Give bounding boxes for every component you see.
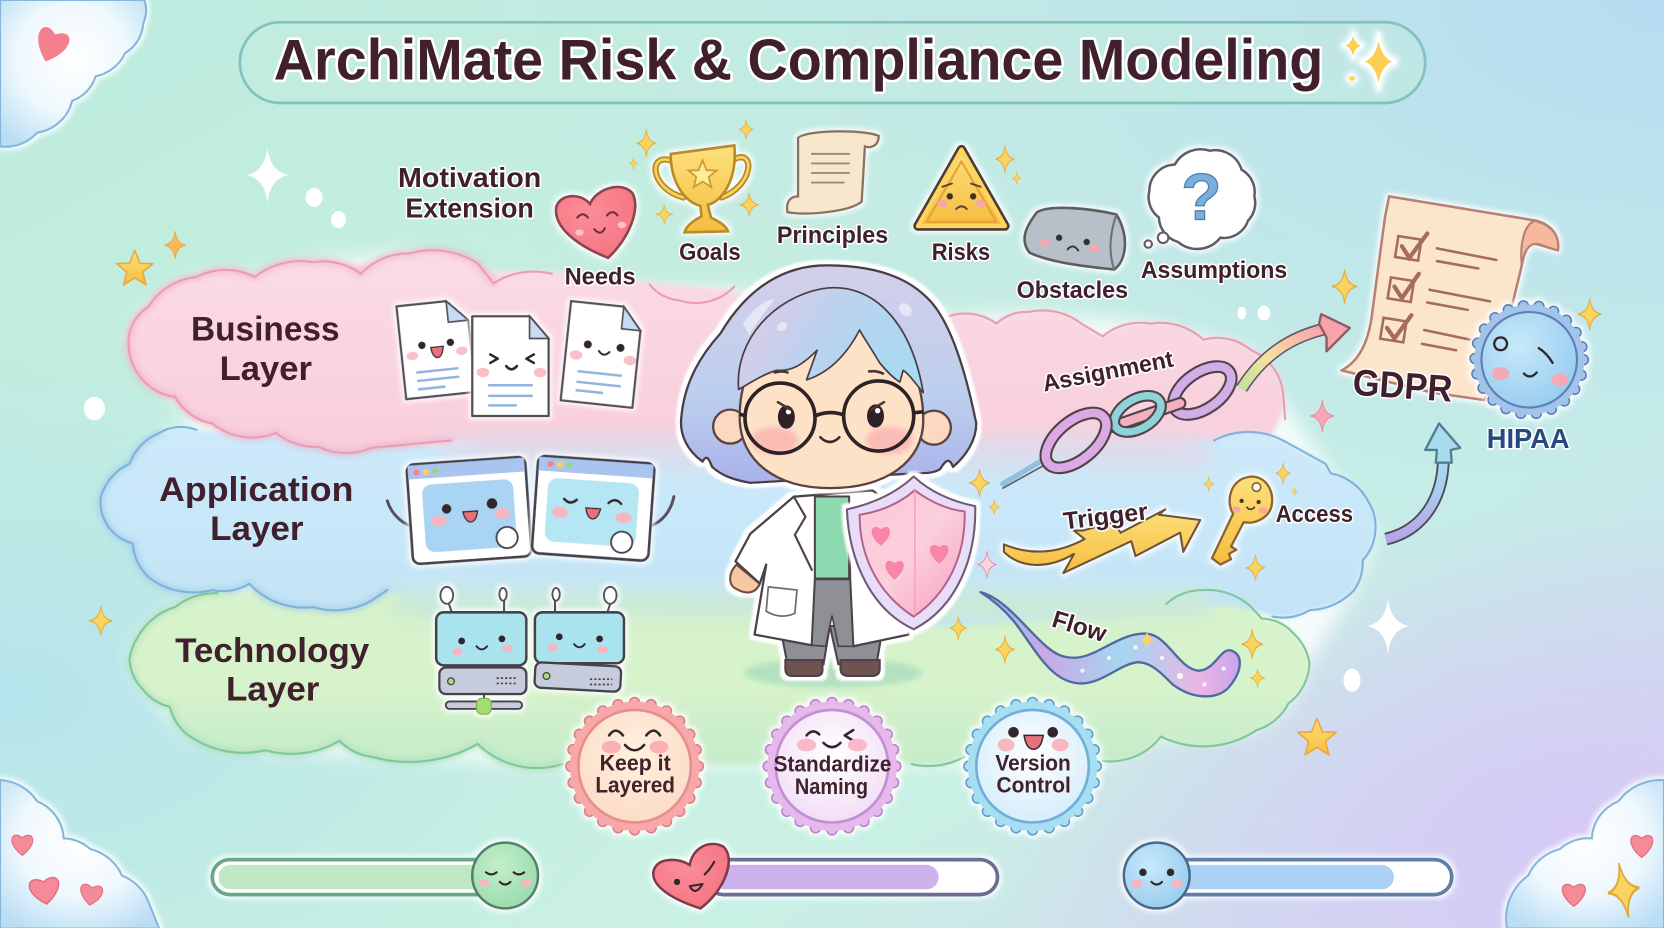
document three — [561, 301, 643, 408]
server two — [534, 587, 624, 692]
label: technology layer — [175, 632, 369, 708]
badge: standardize naming: Standardize — [774, 752, 891, 777]
corner cloud bottom left — [0, 780, 159, 928]
icon: application windows — [387, 456, 674, 564]
icon: hearts — [12, 835, 103, 907]
panel: application layer cloud band — [100, 427, 1376, 626]
label: HIPAA: HIPAA — [1487, 423, 1570, 454]
panel: business layer cloud band — [128, 250, 1285, 478]
eyes — [778, 405, 795, 429]
badge: keep it layered: Layered — [595, 773, 675, 798]
icon: risks triangle — [918, 150, 1005, 226]
progress bar: blue — [1124, 843, 1452, 908]
title pill — [240, 22, 1425, 103]
icon: goals trophy — [656, 145, 748, 232]
label: business layer: Layer — [220, 350, 312, 388]
icon: assumptions thought cloud: ? — [1181, 160, 1221, 234]
label: goals: Goals — [679, 239, 741, 266]
glasses — [740, 381, 923, 453]
label: technology layer: Technology — [175, 632, 369, 670]
window one — [406, 457, 532, 564]
label: risks: Risks — [932, 239, 990, 266]
cloud white glow — [127, 254, 1375, 764]
icon: needs heart — [556, 187, 635, 258]
label: access: Access — [1276, 501, 1353, 528]
soft band transitions — [393, 437, 1210, 620]
icon: principles scroll — [787, 131, 879, 213]
shield — [847, 476, 975, 629]
icon: title sparkles — [1342, 32, 1397, 90]
label: needs: Needs — [565, 263, 636, 290]
label: assumptions: Assumptions — [1141, 257, 1287, 284]
label: business layer: Business — [191, 311, 340, 349]
lapel — [794, 497, 812, 570]
label: assignment: Assignment — [1040, 346, 1176, 397]
cloud edges soft — [100, 250, 562, 768]
fringe — [738, 288, 923, 393]
icon: heart — [31, 25, 71, 67]
arrow: access to HIPAA — [1386, 423, 1460, 539]
server one — [436, 587, 526, 714]
ears — [713, 410, 747, 444]
progress bar: green — [212, 843, 538, 908]
chain links — [1036, 357, 1240, 478]
badge: keep it layered: Keep it — [600, 750, 671, 775]
label: business layer — [191, 311, 340, 388]
badge: version control — [968, 701, 1097, 831]
badge: version control: Version — [995, 750, 1071, 775]
icon: technology servers — [436, 587, 624, 714]
icon: access key — [1212, 476, 1272, 565]
label: obstacles: Obstacles — [1017, 277, 1128, 304]
layer clouds — [100, 250, 1376, 768]
heading: motivation extension: Extension — [405, 193, 534, 224]
hair shine — [743, 299, 912, 335]
character: scientist with shield — [681, 265, 976, 688]
hand — [730, 565, 760, 592]
panel: technology layer cloud — [129, 562, 1310, 768]
arrow: trigger lightning — [1004, 509, 1200, 573]
label: GDPR: GDPR — [1351, 361, 1454, 410]
arrow: flow ribbon — [981, 592, 1240, 696]
decorative stars and sparkles — [84, 120, 1601, 755]
badge: keep it layered — [570, 701, 699, 831]
window arms — [387, 497, 674, 526]
icon: business documents — [396, 299, 643, 416]
label: technology layer: Layer — [226, 670, 319, 708]
coat — [735, 490, 915, 646]
face — [740, 318, 923, 488]
legs — [780, 626, 883, 664]
label: principles: Principles — [777, 222, 888, 249]
icon: GDPR document — [1341, 196, 1558, 400]
document two — [472, 316, 549, 416]
mouth — [820, 437, 839, 442]
badge: version control: Control — [996, 773, 1071, 798]
corner cloud top left — [0, 0, 146, 147]
hair back — [681, 265, 976, 483]
body — [730, 490, 915, 676]
dashed tail — [1003, 458, 1045, 484]
label: application layer: Layer — [210, 510, 304, 548]
label: trigger: Trigger — [1062, 498, 1150, 536]
arrow: assignment chain — [1003, 357, 1240, 488]
icon: assumptions thought cloud — [1145, 149, 1255, 249]
heading: motivation extension: Motivation — [398, 162, 541, 193]
heading: motivation extension — [398, 162, 541, 224]
pocket — [766, 587, 797, 616]
icon: HIPAA badge — [1474, 305, 1584, 415]
badge: standardize naming — [767, 701, 897, 831]
progress bar: purple — [653, 844, 998, 908]
window two — [532, 456, 655, 561]
label: application layer: Application — [159, 471, 353, 509]
label: flow: Flow — [1049, 606, 1111, 648]
document one — [396, 299, 476, 399]
head — [681, 265, 976, 488]
business cloud left lobe — [128, 261, 732, 456]
badge: standardize naming: Naming — [795, 774, 868, 799]
label: application layer — [159, 471, 353, 548]
blush — [751, 427, 798, 454]
title: ArchiMate Risk & Compliance Modeling — [274, 29, 1323, 93]
shadow — [744, 658, 922, 688]
shirt and trousers — [815, 497, 849, 578]
icon: obstacles rock — [1024, 208, 1125, 270]
cloud outlines — [100, 250, 1376, 768]
arrow: chain to GDPR — [1242, 314, 1350, 388]
corner cloud bottom right — [1506, 780, 1664, 928]
icon: hearts and sparkle — [1562, 836, 1653, 920]
